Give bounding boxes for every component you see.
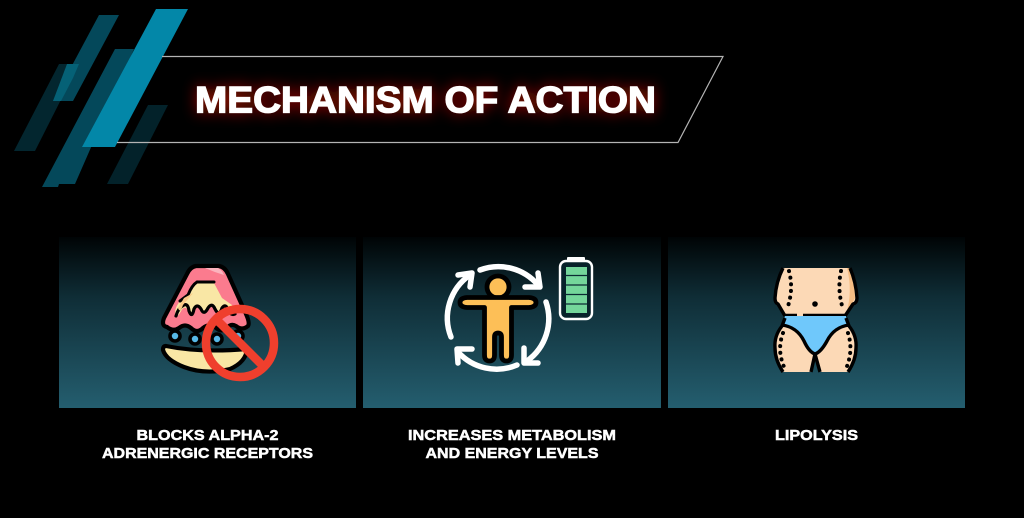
- decorative stripes: [14, 9, 188, 187]
- caption: blocks alpha-2: [102, 427, 313, 462]
- caption: blocks alpha-2: BLOCKS ALPHA-2: [136, 427, 278, 444]
- caption: increases metabolism: [408, 427, 616, 462]
- caption: lipolysis: LIPOLYSIS: [775, 427, 858, 444]
- panel: increases metabolism: [363, 237, 661, 408]
- title: MECHANISM OF ACTION: [195, 80, 656, 120]
- caption: blocks alpha-2: ADRENERGIC RECEPTORS: [102, 445, 313, 462]
- panel: lipolysis: [668, 237, 965, 408]
- title banner outline: [117, 56, 723, 142]
- icon: body metabolism cycle: [447, 257, 592, 369]
- icon: waist and hips with incision marks: [775, 268, 857, 372]
- icon: person: [460, 276, 536, 361]
- panel: blocks alpha-2 receptors: [59, 237, 356, 408]
- caption: increases metabolism: AND ENERGY LEVELS: [426, 445, 598, 462]
- caption: increases metabolism: INCREASES METABOLISM: [408, 427, 616, 444]
- icon: fat cell with prohibition sign: [163, 266, 274, 377]
- title: MECHANISM OF ACTION: [195, 80, 656, 120]
- icon: battery: [560, 257, 592, 319]
- icon: prohibition sign: [206, 309, 274, 377]
